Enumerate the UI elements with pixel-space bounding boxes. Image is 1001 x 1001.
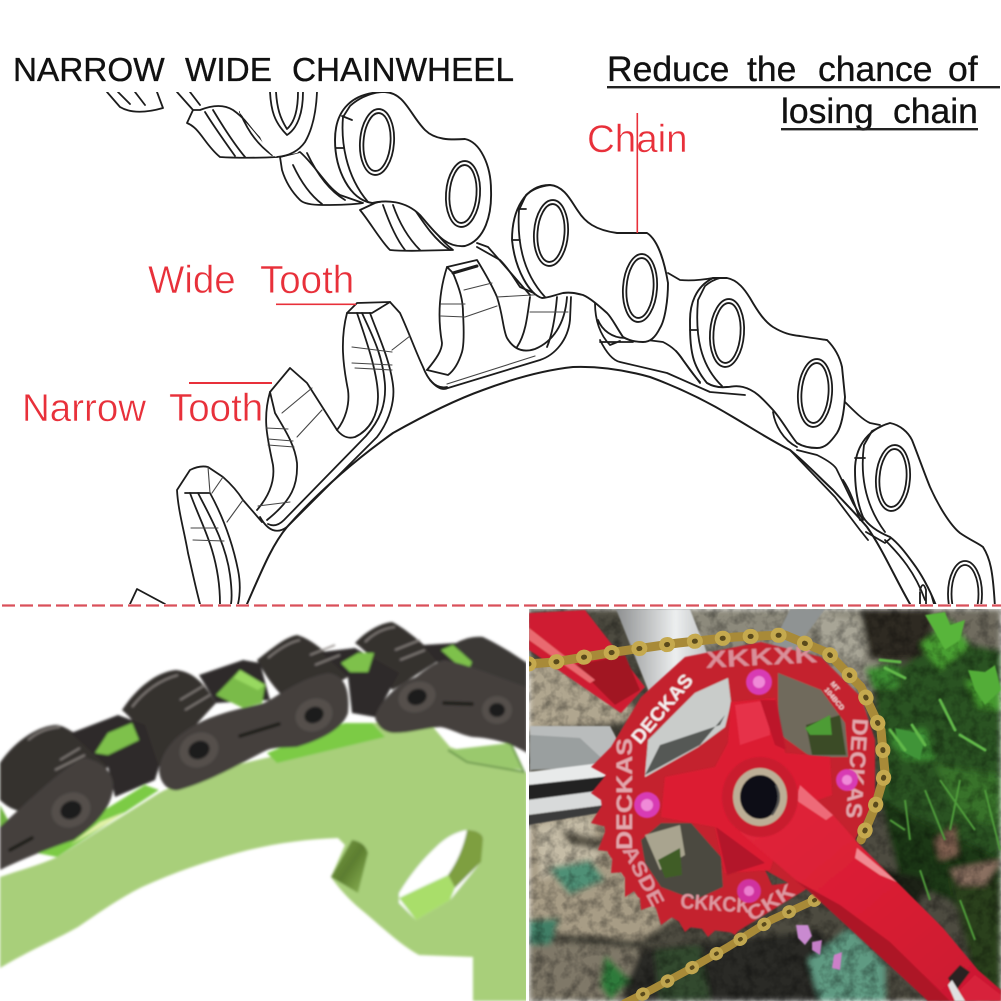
rollers	[0, 725, 108, 812]
opposite crank arm	[529, 610, 645, 713]
label: wide tooth: Tooth	[260, 259, 354, 302]
tagline: reduce the chance of losing chain: losing	[781, 91, 874, 131]
rocks at left	[529, 660, 640, 730]
ring body	[601, 642, 875, 933]
heading: narrow wide chainwheel: NARROW	[13, 52, 165, 89]
label: wide tooth	[148, 259, 356, 305]
chainring: CKKCK	[680, 890, 751, 918]
bottom bracket	[722, 757, 798, 837]
tagline: reduce the chance of losing chain: chain	[893, 91, 978, 131]
chainring: CKK	[743, 880, 799, 926]
chainring teeth	[177, 260, 571, 604]
heading: narrow wide chainwheel: CHAINWHEEL	[292, 52, 514, 89]
roller highlights	[28, 627, 425, 770]
chain link one	[335, 92, 491, 246]
chainring inner edge	[247, 367, 910, 604]
label: narrow tooth	[22, 382, 272, 430]
tree trunk at top right	[690, 609, 882, 714]
label: narrow tooth: Narrow	[22, 387, 146, 430]
chainring: DECKAS	[628, 670, 698, 748]
teeth	[590, 746, 738, 938]
background seen through ring openings	[778, 673, 848, 757]
photo panel: green chainring with chain close-up	[0, 622, 528, 1001]
chainring: ASDE	[618, 842, 668, 911]
chainring: MT	[828, 681, 841, 694]
label: chain	[587, 113, 688, 233]
tooth outline	[449, 743, 522, 770]
label: chain: Chain	[587, 118, 688, 161]
white mask above drawing	[0, 0, 1001, 92]
chain link four	[855, 423, 995, 627]
foliage and rock texture	[529, 609, 1001, 1001]
inner plates	[71, 715, 159, 797]
pedal end of crank	[948, 965, 970, 992]
ring pattern letters: DECKAS	[612, 738, 637, 850]
greenery at right	[875, 640, 1001, 870]
notch	[331, 840, 368, 893]
tagline: reduce the chance of losing chain	[607, 49, 1000, 131]
frame tubes	[528, 609, 825, 825]
flowers	[796, 925, 842, 970]
gold chain	[528, 635, 885, 1001]
tagline: reduce the chance of losing chain: the	[747, 49, 796, 89]
front plates	[0, 758, 113, 870]
tagline: reduce the chance of losing chain: of	[948, 49, 978, 89]
tagline: reduce the chance of losing chain: Reduce	[607, 49, 729, 89]
heading: narrow wide chainwheel: WIDE	[185, 52, 272, 89]
photo background	[529, 609, 1001, 1001]
chainring: 104BCD	[822, 687, 845, 712]
photo panel: red crankset with gold chain	[528, 609, 1001, 1001]
green chainring body	[0, 622, 528, 1001]
label: wide tooth: Wide	[148, 259, 236, 302]
heading: narrow wide chainwheel	[13, 52, 514, 89]
rear chain plates and rollers	[107, 92, 934, 604]
chain plate with hole at upper left	[240, 92, 317, 157]
chain link three	[690, 278, 845, 448]
bright bevels under chain	[37, 785, 159, 857]
technical line drawing: chain and chainring	[107, 92, 995, 627]
bolt hole	[399, 830, 483, 920]
dashed divider	[2, 604, 1001, 607]
chainring: DECKAS	[841, 718, 873, 819]
chain link two	[512, 185, 668, 342]
plate slots	[10, 703, 472, 850]
crank spider	[661, 698, 832, 875]
partial tooth at lower left	[130, 589, 165, 604]
chainring	[591, 641, 875, 937]
crank arm	[735, 782, 1001, 1001]
bottom teal leaves	[808, 928, 885, 1001]
leaves	[805, 612, 1001, 940]
tagline: reduce the chance of losing chain: chance	[818, 49, 932, 89]
label: narrow tooth: Tooth	[169, 387, 263, 430]
chain pin holes	[52, 792, 90, 828]
bolts	[634, 669, 858, 903]
chainring: XKKXK	[705, 641, 819, 674]
green teeth between plates	[95, 723, 139, 755]
